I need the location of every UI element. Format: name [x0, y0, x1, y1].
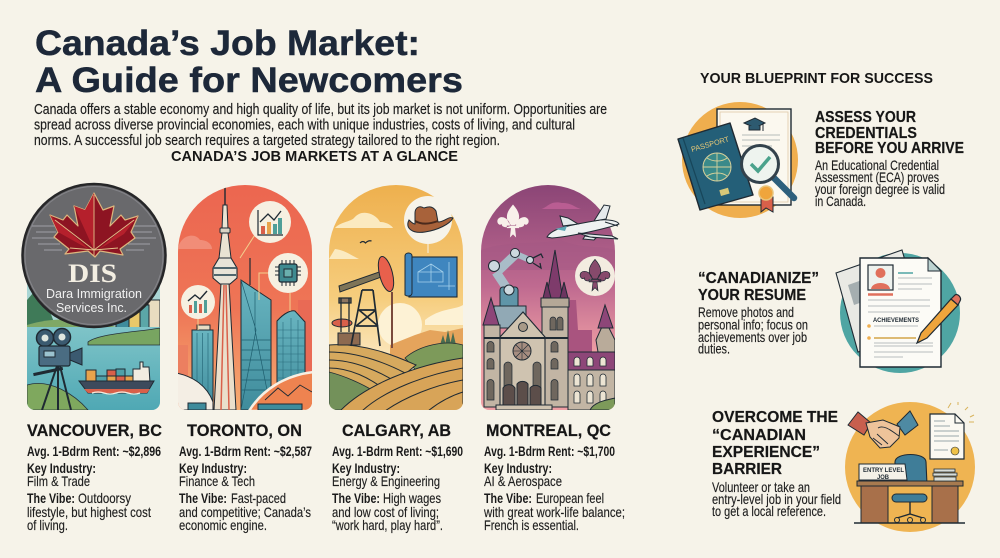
cathedral: [483, 250, 569, 410]
glass tower: [241, 280, 271, 410]
text block: Montreal: AI & Aerospace: [484, 473, 562, 489]
text block: Vancouver: of living.: [27, 517, 68, 533]
text block: Toronto: Fast-paced: [231, 490, 286, 506]
text block: Vancouver: The Vibe:: [27, 490, 75, 506]
icon: microchip bubble: [268, 253, 308, 293]
text block: Montreal: Avg. 1-Bdrm Rent: ~$1,700: [484, 443, 615, 459]
text block: Vancouver: [27, 421, 162, 533]
text block: Toronto: Avg. 1-Bdrm Rent: ~$2,587: [179, 443, 312, 459]
icon: finance chart bubble: [181, 285, 215, 319]
title: [35, 24, 463, 100]
text block: canadianize resume: duties.: [698, 340, 730, 356]
icon: fleur-de-lis bubble: [575, 256, 615, 296]
icon: line chart bubble: [249, 201, 291, 243]
text block: canadian experience: [712, 409, 841, 519]
logo: Dara Immigration Services badge: Dara Immigration: [46, 287, 142, 301]
panel: Toronto illustration: [170, 183, 314, 411]
text block: Calgary: Key Industry:: [332, 460, 400, 476]
text block: canadian experience: “CANADIAN: [712, 427, 806, 444]
left teal tower: [192, 325, 213, 410]
icon: robot arm: [488, 248, 543, 328]
text block: Calgary: CALGARY, AB: [342, 421, 451, 440]
intro paragraph: norms. A successful job search requires a targeted strategy tailored to the right region.: [34, 133, 500, 149]
text block: Toronto: economic engine.: [179, 517, 267, 533]
right tower: [277, 311, 305, 410]
text block: canadian experience: to get a local reference.: [712, 503, 826, 519]
text block: Vancouver: Key Industry:: [27, 460, 96, 476]
text block: Calgary: High wages: [383, 490, 441, 506]
intro paragraph: spread across diverse provincial economies, each with unique industries, costs of living, and cultural: [34, 118, 575, 134]
icon: container ship: [79, 362, 154, 394]
icon: maple leaf: [50, 193, 138, 257]
panel: Vancouver illustration: [27, 284, 160, 410]
text block: canadianize resume: “CANADIANIZE”: [698, 270, 819, 287]
icon: white fleur-de-lis: [497, 204, 529, 237]
text block: assess credentials: ASSESS YOUR: [815, 109, 916, 126]
logo: Dara Immigration Services badge: [22, 184, 166, 327]
text block: canadian experience: BARRIER: [712, 461, 782, 478]
text block: Toronto: The Vibe:: [179, 490, 227, 506]
heading: markets at a glance: CANADA’S JOB MARKETS AT A GLANCE: [171, 148, 458, 165]
icon: resume with pencil: ACHIEVEMENTS: [873, 317, 920, 324]
text block: canadianize resume: YOUR RESUME: [698, 287, 806, 304]
text block: Vancouver: Outdoorsy: [78, 490, 131, 506]
text block: Calgary: The Vibe:: [332, 490, 380, 506]
text block: Toronto: Key Industry:: [179, 460, 247, 476]
icon: handshake and entry level desk: ENTRY LEVEL: [863, 467, 904, 474]
text block: Toronto: TORONTO, ON: [187, 421, 302, 440]
icon: cowboy hat bubble: [404, 196, 453, 244]
text block: assess credentials: CREDENTIALS: [815, 125, 917, 142]
icon: passport and credential: [678, 102, 798, 218]
icon: film camera on tripod: [33, 328, 82, 410]
text block: Montreal: Key Industry:: [484, 460, 552, 476]
text block: canadian experience: Volunteer or take an: [712, 479, 810, 495]
heading: blueprint for success: YOUR BLUEPRINT FOR SUCCESS: [700, 70, 933, 87]
icon: airplane: [547, 205, 619, 240]
text block: canadian experience: entry-level job in your field: [712, 491, 841, 507]
icon: handshake and entry level desk: JOB: [877, 474, 889, 481]
text block: Calgary: [332, 421, 463, 533]
title: Canada’s Job Market:: [35, 24, 420, 63]
icon: resume with pencil: [836, 250, 961, 373]
text block: Vancouver: VANCOUVER, BC: [27, 421, 162, 440]
text block: Montreal: European feel: [536, 490, 604, 506]
logo: Dara Immigration Services badge: Services Inc.: [56, 301, 127, 315]
text block: canadian experience: EXPERIENCE”: [712, 444, 820, 461]
text block: Calgary: Energy & Engineering: [332, 473, 440, 489]
text block: canadianize resume: [698, 270, 819, 356]
text block: Vancouver: Avg. 1-Bdrm Rent: ~$2,896: [27, 443, 161, 459]
text block: assess credentials: your foreign degree is valid: [815, 181, 945, 197]
text block: Calgary: Avg. 1-Bdrm Rent: ~$1,690: [332, 443, 463, 459]
text block: Vancouver: Film & Trade: [27, 473, 90, 489]
text block: Calgary: “work hard, play hard”.: [332, 517, 443, 533]
text block: Toronto: and competitive; Canada’s: [179, 504, 311, 520]
text block: assess credentials: in Canada.: [815, 193, 866, 209]
text block: Montreal: French is essential.: [484, 517, 579, 533]
text block: assess credentials: BEFORE YOU ARRIVE: [815, 140, 964, 157]
text block: assess credentials: [815, 109, 964, 209]
icon: oil pumpjack: [332, 255, 397, 348]
text block: canadianize resume: Remove photos and: [698, 304, 794, 320]
text block: Montreal: MONTREAL, QC: [486, 421, 611, 440]
text block: assess credentials: Assessment (ECA) proves: [815, 169, 939, 185]
logo: Dara Immigration Services badge: DIS: [68, 259, 117, 288]
text block: Calgary: and low cost of living;: [332, 504, 439, 520]
icon: handshake and entry level desk: [845, 402, 975, 532]
text block: canadianize resume: achievements over job: [698, 329, 807, 345]
text block: Vancouver: lifestyle, but highest cost: [27, 504, 151, 520]
text block: Montreal: with great work-life balance;: [483, 504, 625, 520]
intro paragraph: [34, 102, 607, 149]
intro paragraph: Canada offers a stable economy and high quality of life, but its job market is not uniform. Opportunities are: [34, 102, 607, 118]
icon: blueprint: [405, 253, 457, 297]
panel: Montreal illustration: [481, 185, 619, 410]
text block: Toronto: [179, 421, 312, 533]
side building: [568, 305, 615, 410]
panel: Calgary illustration: [329, 185, 463, 411]
handshake: [848, 411, 918, 448]
text block: Toronto: Finance & Tech: [179, 473, 255, 489]
text block: canadianize resume: personal info; focus on: [698, 316, 808, 332]
CN Tower: [213, 183, 237, 410]
text block: assess credentials: An Educational Credential: [815, 157, 939, 173]
text block: Montreal: The Vibe:: [484, 490, 532, 506]
text block: Montreal: [483, 421, 625, 533]
text block: canadian experience: OVERCOME THE: [712, 409, 838, 426]
icon: passport and credential: PASSPORT: [690, 134, 730, 154]
title: A Guide for Newcomers: [35, 61, 463, 100]
